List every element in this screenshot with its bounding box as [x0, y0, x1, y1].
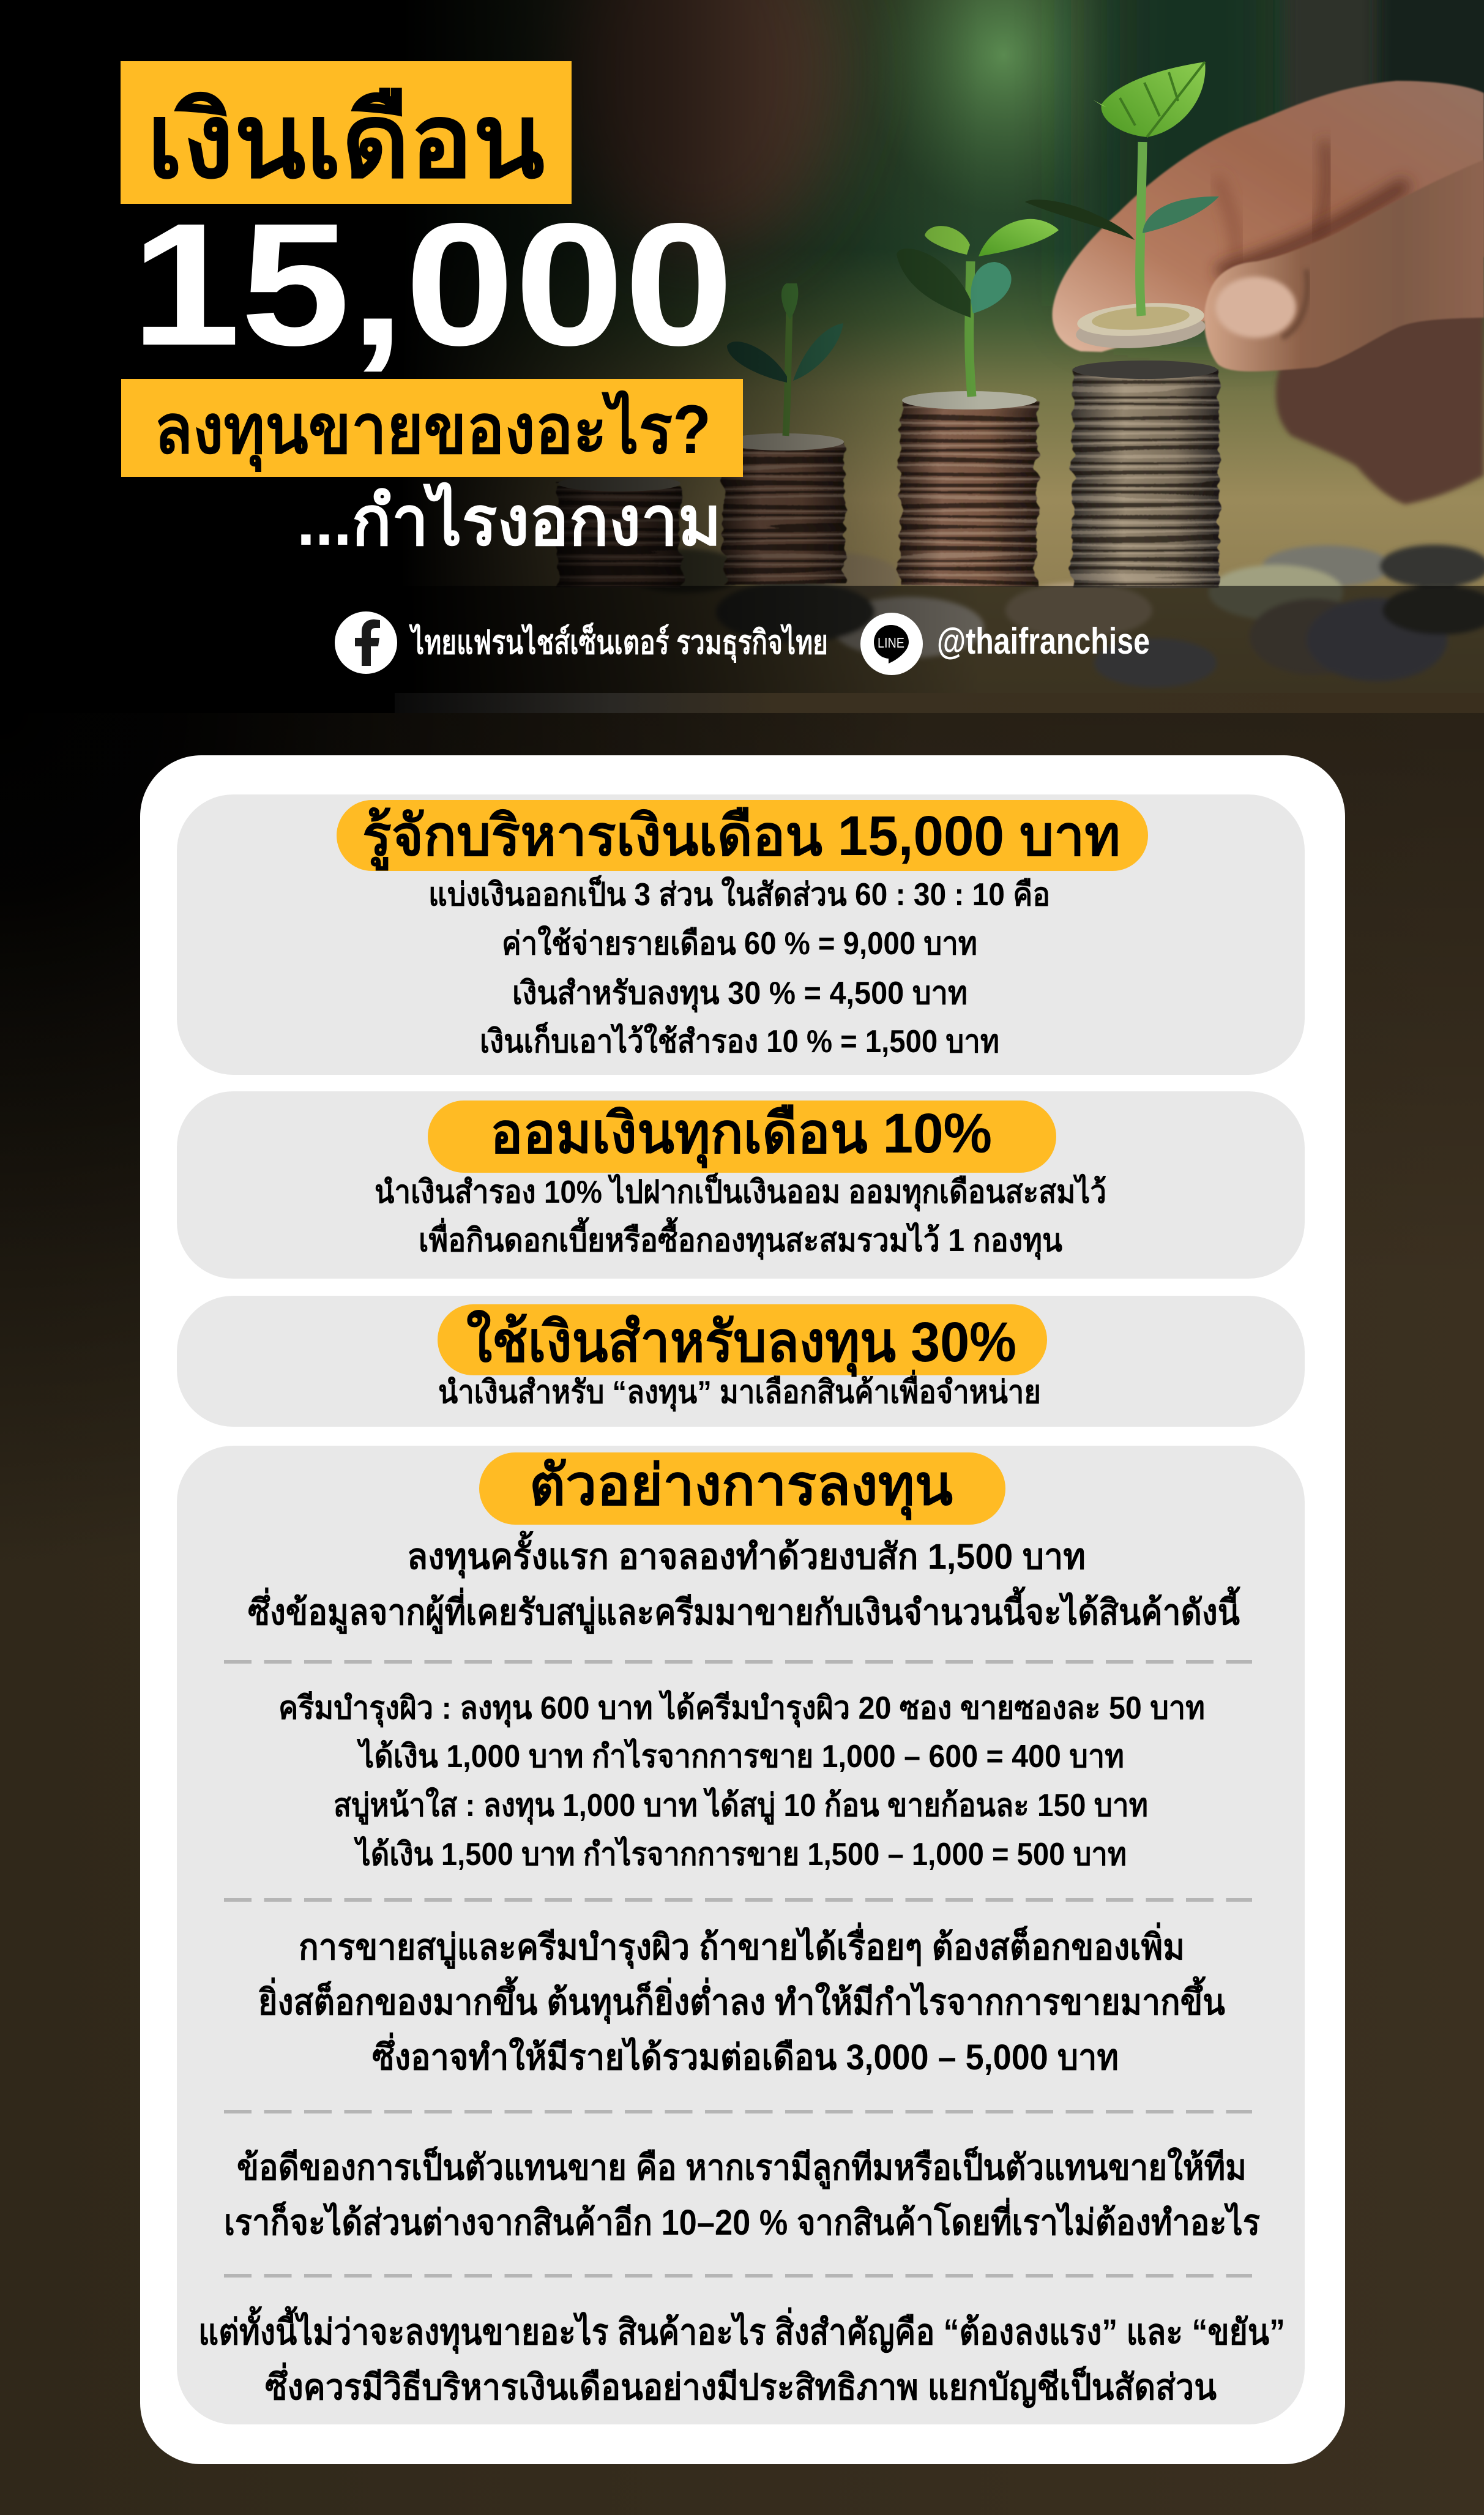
text: savings detail: นำเงินสำรอง 10% ไปฝากเป็นเงินออม ออมทุกเดือนสะสมไว้ [375, 1173, 1106, 1212]
amount: 15,000: 15,000 [131, 187, 734, 382]
text: agent advantage [224, 2146, 1260, 2243]
social: line: @thaifranchise [937, 621, 1150, 662]
text: conclusion: ซึ่งควรมีวิธีบริหารเงินเดือนอย่างมีประสิทธิภาพ แยกบัญชีเป็นสัดส่วน [265, 2362, 1217, 2408]
coin held by fingers [1076, 303, 1206, 348]
coin stack 1 [558, 476, 681, 588]
social: line [860, 613, 1150, 675]
text: first investment: ลงทุนครั้งแรก อาจลองทำด้วยงบสัก 1,500 บาท [407, 1531, 1086, 1579]
heading pill: investment money: ใช้เงินสำหรับลงทุน 30% [466, 1310, 1016, 1377]
coin stack 3 [900, 391, 1037, 586]
text: stocking up: การขายสบู่และครีมบำรุงผิว ถ้าขายได้เรื่อยๆ ต้องสต็อกของเพิ่ม [299, 1922, 1185, 1970]
panel: investment example [177, 1446, 1305, 2424]
text: agent advantage: ข้อดีของการเป็นตัวแทนขาย คือ หากเรามีลูกทีมหรือเป็นตัวแทนขายให้ทีม [237, 2146, 1247, 2189]
text: first investment: ซึ่งข้อมูลจากผู้ที่เคยรับสบู่และครีมมาขายกับเงินจำนวนนี้จะได้สินค้าดังนี้ [248, 1586, 1241, 1634]
dark band behind social links [0, 586, 1484, 693]
panel: investment money [177, 1296, 1305, 1427]
panel: manage salary [177, 794, 1305, 1075]
text: product examples: ได้เงิน 1,000 บาท กำไรจากการขาย 1,000 – 600 = 400 บาท [356, 1738, 1124, 1774]
text: stocking up: ซึ่งอาจทำให้มีรายได้รวมต่อเดือน 3,000 – 5,000 บาท [372, 2032, 1119, 2077]
heading pill: manage salary: รู้จักบริหารเงินเดือน 15,000 บาท [362, 805, 1120, 871]
coins scattered on the table [624, 545, 1484, 687]
text: savings detail [375, 1173, 1106, 1260]
text: product examples: ครีมบำรุงผิว : ลงทุน 600 บาท ได้ครีมบำรุงผิว 20 ซอง ขายซองละ 50 บาท [278, 1689, 1205, 1728]
heading pill: monthly savings: ออมเงินทุกเดือน 10% [490, 1102, 992, 1168]
dark left fade over photo [0, 0, 1484, 713]
seedling on fourth stack [1025, 62, 1219, 316]
panel: monthly savings [177, 1091, 1305, 1279]
icon: facebook [335, 611, 397, 674]
text: savings detail: เพื่อกินดอกเบี้ยหรือซื้อกองทุนสะสมรวมไว้ 1 กองทุน [419, 1217, 1062, 1260]
social: facebook: ไทยแฟรนไชส์เซ็นเตอร์ รวมธุรกิจไทย [409, 623, 828, 663]
text: product examples: สบู่หน้าใส : ลงทุน 1,000 บาท ได้สบู่ 10 ก้อน ขายก้อนละ 150 บาท [334, 1787, 1148, 1825]
text: salary split: ค่าใช้จ่ายรายเดือน 60 % = 9,000 บาท [502, 925, 977, 962]
seedling on third stack [897, 219, 1059, 397]
text: agent advantage: เราก็จะได้ส่วนต่างจากสินค้าอีก 10–20 % จากสินค้าโดยที่เราไม่ต้องทำอะไร [224, 2197, 1260, 2243]
header photo: coins, seedlings and hand [0, 0, 1484, 713]
text: stocking up: ยิ่งสต็อกของมากขึ้น ต้นทุนก็ยิ่งต่ำลง ทำให้มีกำไรจากการขายมากขึ้น [258, 1976, 1225, 2025]
title box: เงินเดือน: เงินเดือน [147, 83, 545, 200]
text: salary split: แบ่งเงินออกเป็น 3 ส่วน ในสัดส่วน 60 : 30 : 10 คือ [428, 875, 1050, 913]
hand [1052, 81, 1484, 504]
text: conclusion: แต่ทั้งนี้ไม่ว่าจะลงทุนขายอะไร สินค้าอะไร สิ่งสำคัญคือ “ต้องลงแรง” และ “ขยัน” [198, 2306, 1285, 2355]
social: facebook [335, 611, 828, 674]
text: conclusion [198, 2306, 1285, 2408]
subtitle box: ลงทุนขายของอะไร?: ลงทุนขายของอะไร? [154, 391, 711, 473]
heading pill: investment example: ตัวอย่างการลงทุน [529, 1454, 953, 1520]
text: product examples [278, 1689, 1205, 1872]
seedling on second stack [727, 283, 843, 436]
lower band of photo [0, 693, 1484, 713]
icon: line: LINE [878, 635, 904, 651]
text: stocking up [258, 1922, 1225, 2077]
coin stack 4 [1072, 361, 1219, 588]
text: salary split: เงินสำหรับลงทุน 30 % = 4,500 บาท [512, 976, 968, 1013]
text: salary split [428, 875, 1050, 1059]
icon: line [860, 613, 923, 675]
tagline: ...กำไรงอกงาม [297, 482, 721, 559]
white content card [140, 755, 1345, 2464]
coin stack 2 [724, 433, 845, 584]
text: first investment [248, 1531, 1241, 1634]
text: product examples: ได้เงิน 1,500 บาท กำไรจากการขาย 1,500 – 1,000 = 500 บาท [353, 1836, 1127, 1872]
text: investment detail: นำเงินสำหรับ “ลงทุน” มาเลือกสินค้าเพื่อจำหน่าย [438, 1370, 1041, 1412]
text: salary split: เงินเก็บเอาไว้ใช้สำรอง 10 % = 1,500 บาท [480, 1022, 999, 1059]
